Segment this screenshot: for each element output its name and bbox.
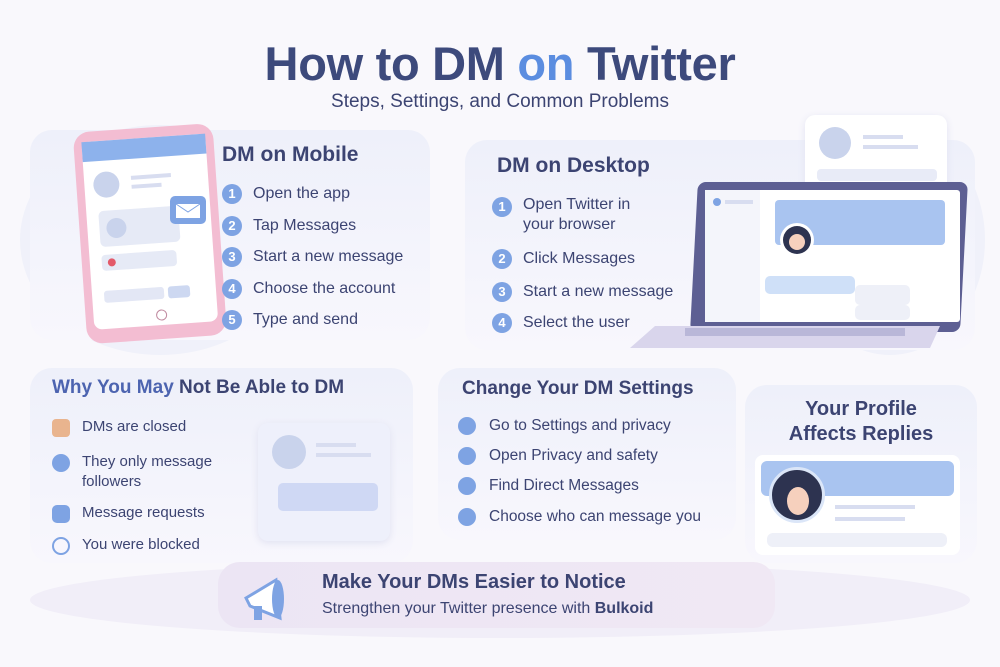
list: reasons: You were blocked (82, 536, 200, 553)
list: reasons: They only message (82, 453, 212, 470)
list: reasons: DMs are closed (82, 418, 186, 435)
title: How to DM on Twitter (265, 37, 735, 90)
steps: desktop: Click Messages (523, 250, 635, 267)
steps: desktop: 2 (498, 251, 506, 266)
illustration: profile card (805, 115, 947, 193)
steps: mobile: Open the app (253, 185, 350, 202)
steps: mobile: 5 (228, 312, 236, 327)
list: settings steps: Open Privacy and safety (489, 447, 658, 464)
heading: Change Your DM Settings (462, 378, 694, 399)
steps: mobile: Start a new message (253, 248, 403, 265)
steps: mobile: 3 (228, 249, 236, 264)
list: settings steps: Find Direct Messages (489, 477, 639, 494)
steps: desktop: Select the user (523, 314, 630, 331)
banner: Make Your DMs Easier to Notice (218, 562, 775, 628)
steps: mobile: 4 (228, 281, 236, 296)
list: settings steps: Go to Settings and privacy (489, 417, 671, 434)
list: settings steps (458, 417, 701, 526)
list: reasons: Message requests (82, 504, 205, 521)
panel: Your Profile Affects Replies (745, 385, 977, 563)
list: reasons (52, 418, 212, 555)
heading: Your Profile (805, 398, 917, 420)
steps: desktop: 1 (498, 199, 506, 214)
heading: DM on Desktop: DM on Desktop (497, 154, 650, 177)
illustration: profile chat card (258, 423, 390, 541)
steps: desktop: Open Twitter in (523, 196, 630, 213)
heading: Why You May Not Be Able to DM (52, 377, 344, 398)
banner title: Make Your DMs Easier to Notice (322, 571, 626, 593)
steps: mobile: Tap Messages (253, 217, 356, 234)
heading (789, 398, 933, 445)
steps: mobile: 1 (228, 186, 236, 201)
steps: desktop (492, 196, 673, 333)
heading: Affects Replies (789, 423, 933, 445)
steps: mobile: Choose the account (253, 280, 395, 297)
list: reasons: followers (82, 473, 141, 490)
banner subtitle: Strengthen your Twitter presence with Bulkoid (322, 600, 653, 617)
subtitle: Steps, Settings, and Common Problems (331, 91, 669, 112)
steps: mobile (222, 184, 403, 330)
steps: desktop: Start a new message (523, 283, 673, 300)
illustration: laptop (630, 182, 968, 348)
icon: envelope bubble (170, 196, 206, 224)
steps: desktop: 3 (498, 284, 506, 299)
panel: Why You May Not Be Able to DM (30, 368, 413, 563)
steps: mobile: 2 (228, 218, 236, 233)
panel: Change Your DM Settings (438, 368, 736, 540)
panel: DM on Mobile (30, 130, 430, 340)
illustration: profile card (755, 455, 960, 555)
panel: DM on Desktop (465, 140, 975, 350)
steps: mobile: Type and send (253, 311, 358, 328)
steps: desktop: your browser (523, 216, 615, 233)
heading: DM on Mobile: DM on Mobile (222, 143, 358, 166)
illustration: phone (74, 124, 226, 344)
steps: desktop: 4 (498, 315, 506, 330)
list: settings steps: Choose who can message you (489, 508, 701, 525)
icon: megaphone (244, 578, 284, 620)
